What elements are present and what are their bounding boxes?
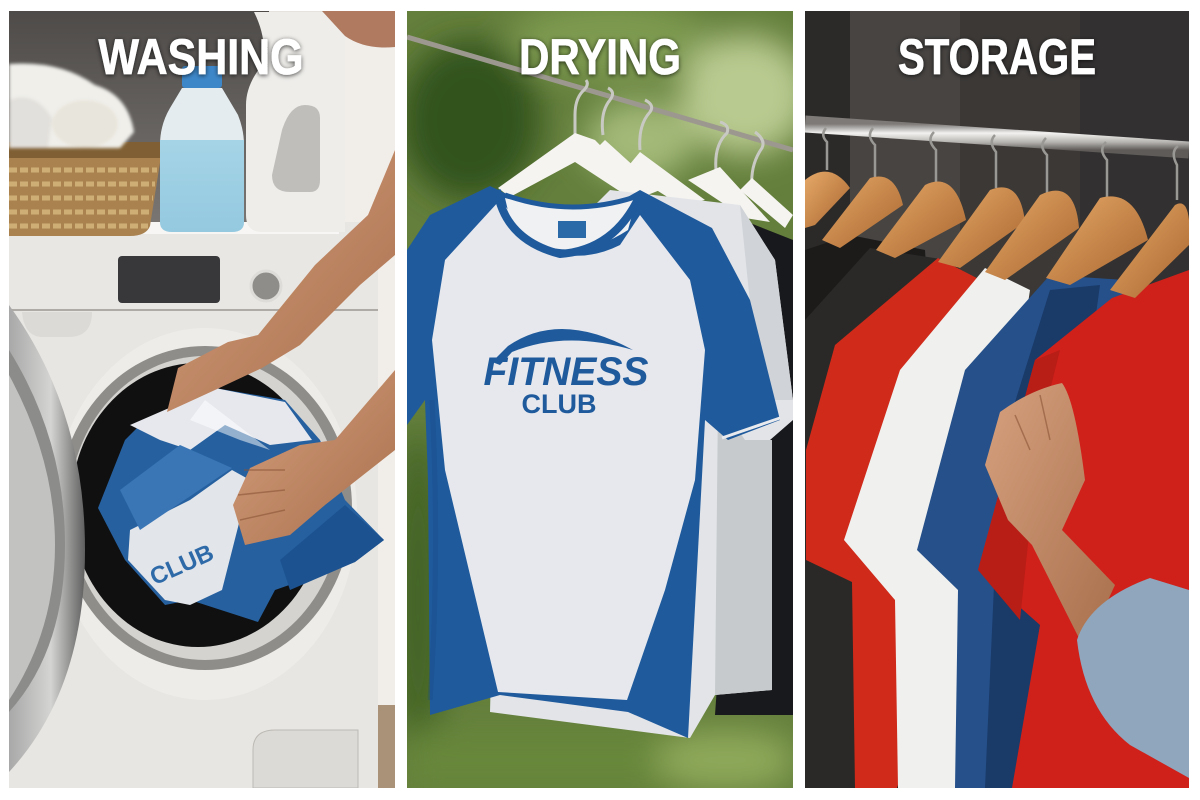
panel: drying	[407, 11, 793, 788]
washer drum	[72, 346, 352, 670]
blurred garden background	[407, 11, 793, 788]
main shirt: fitness club jersey: CLUB	[522, 389, 596, 419]
panel: storage	[805, 11, 1189, 790]
laundry basket	[9, 142, 162, 236]
logo arc	[492, 329, 633, 365]
control knob	[251, 271, 281, 301]
washing machine body	[9, 222, 378, 792]
dark closet background	[805, 11, 1189, 788]
control panel display	[118, 256, 220, 303]
denim sleeve	[1077, 578, 1189, 778]
title: storage: STORAGE	[898, 29, 1096, 85]
hand and forearm	[985, 383, 1115, 650]
logo text: FITNESS	[484, 350, 649, 394]
blue detergent bottle	[160, 66, 244, 232]
red shirt	[806, 258, 976, 788]
white hanger arms	[498, 133, 793, 228]
wall background	[9, 11, 395, 788]
black shirts	[805, 236, 926, 788]
person face at top	[322, 11, 395, 48]
main shirt: fitness club jersey	[407, 186, 780, 738]
wooden hangers	[805, 172, 1189, 298]
red front shirt	[978, 270, 1189, 788]
navy shirt	[917, 275, 1125, 788]
hanger hooks	[823, 128, 1178, 200]
laundry: blue and white shirt	[98, 388, 384, 622]
smeared logo on laundry: CLUB	[146, 539, 218, 591]
white detergent jug	[246, 12, 345, 232]
clothes rod	[407, 37, 793, 150]
shirts on rail	[805, 235, 1189, 790]
hangers	[575, 80, 763, 188]
white shirt	[844, 268, 1030, 788]
title: drying: DRYING	[519, 29, 681, 85]
back shirts	[490, 190, 793, 738]
title: washing: WASHING	[98, 29, 304, 85]
folded towels	[9, 63, 134, 148]
washer door	[9, 305, 85, 772]
panel: washing	[9, 11, 395, 792]
arms reaching into washer	[167, 150, 395, 545]
chrome rail	[805, 124, 1189, 150]
